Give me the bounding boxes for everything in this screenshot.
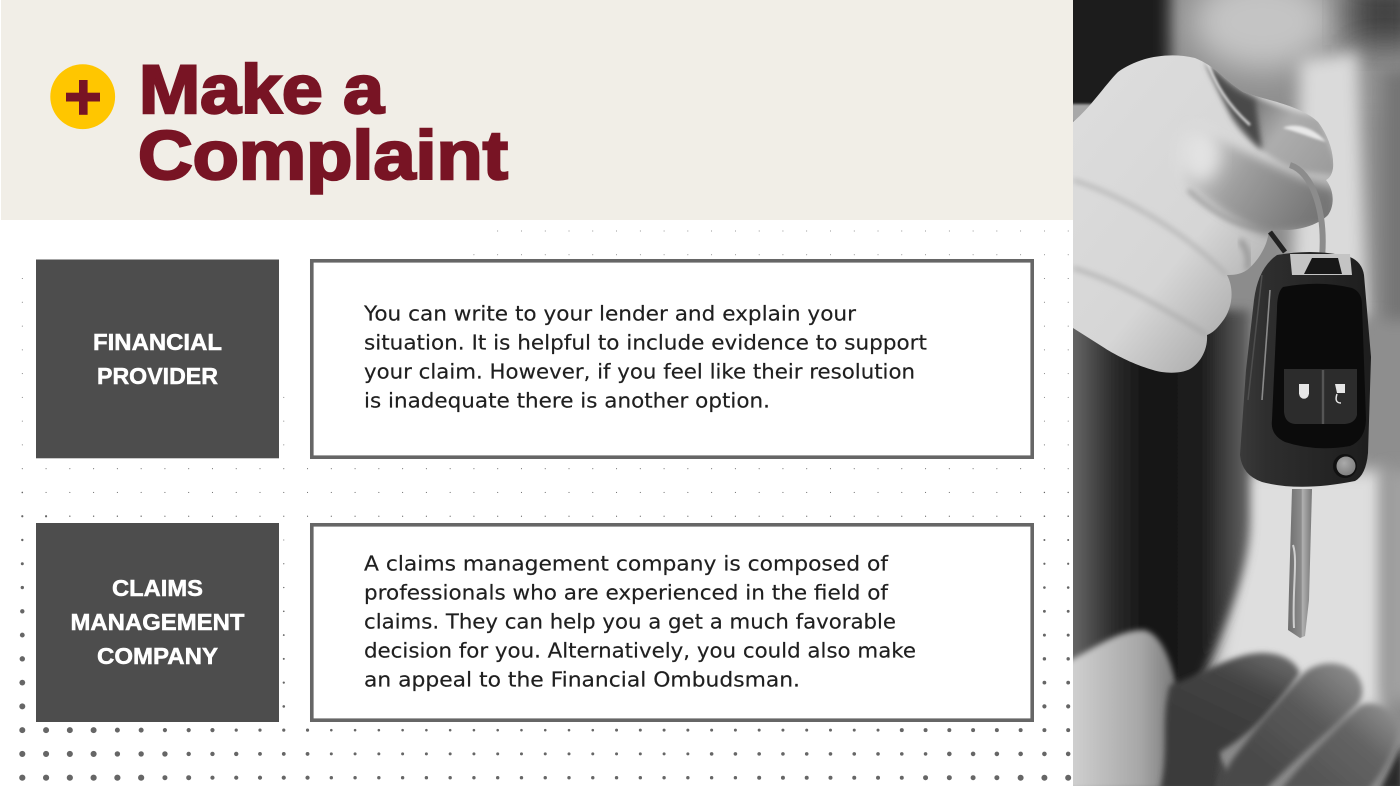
panel: financial provider description: your claim. However, if you feel like their resolution	[364, 360, 915, 384]
panel: claims management company description: decision for you. Alternatively, you could also make	[364, 638, 916, 662]
key blade	[1288, 489, 1312, 638]
panel: financial provider label: PROVIDER	[97, 363, 218, 389]
photo: hand passing car key	[1040, 0, 1400, 787]
panel: financial provider label: FINANCIAL	[93, 329, 222, 355]
panel: claims management company description: an appeal to the Financial Ombudsman.	[364, 668, 800, 692]
key ring	[1290, 165, 1323, 258]
panel: claims management company label: MANAGEMENT	[70, 609, 244, 635]
blurred receiving hand	[1060, 630, 1400, 787]
panel: financial provider description: is inadequate there is another option.	[364, 388, 770, 412]
title: Complaint	[138, 117, 508, 194]
panel: financial provider description	[312, 261, 1032, 457]
panel: claims management company label: CLAIMS	[112, 575, 203, 601]
header band	[1, 0, 1073, 220]
panel: financial provider label	[36, 260, 279, 458]
panel: claims management company label: COMPANY	[97, 643, 218, 669]
panel: claims management company label	[36, 523, 279, 722]
panel: financial provider description: situation. It is helpful to include evidence to support	[364, 330, 927, 354]
hand holding key	[1073, 55, 1340, 373]
panel: claims management company description: claims. They can help you a get a much favorable	[364, 610, 896, 634]
key strap	[1270, 232, 1285, 252]
icon: plus in yellow circle	[50, 64, 115, 129]
panel: claims management company description: professionals who are experienced in the field of	[364, 580, 889, 604]
title: Make a	[139, 51, 385, 128]
halftone dot pattern	[22, 231, 1068, 778]
title	[138, 51, 508, 194]
panel: claims management company description	[312, 525, 1032, 720]
key fob	[1240, 252, 1371, 487]
panel: claims management company description: A claims management company is composed of	[364, 552, 889, 576]
panel: financial provider description: You can write to your lender and explain your	[363, 302, 857, 326]
